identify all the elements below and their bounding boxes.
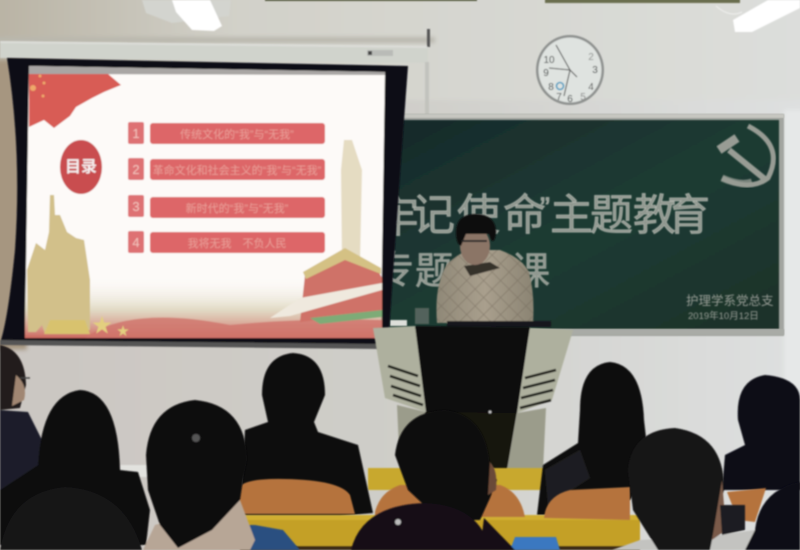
tiananmen and monument bbox=[270, 140, 382, 324]
chalk heading: 命 bbox=[503, 192, 546, 240]
wall clock: 6 bbox=[567, 94, 573, 105]
contents row 4: 我将无我 不负人民 bbox=[188, 236, 286, 250]
front row students bbox=[0, 345, 800, 550]
wall clock: 5 bbox=[580, 92, 586, 103]
wall clock: 3 bbox=[592, 65, 598, 76]
student: short hair centre bbox=[240, 353, 373, 516]
chalk heading: 主 bbox=[550, 192, 593, 240]
projector screen housing bbox=[0, 29, 430, 118]
contents row 1: 1 bbox=[132, 126, 140, 141]
contents row 2: 革命文化和社会主义的“我”与“无我” bbox=[153, 163, 322, 177]
back row students bbox=[240, 353, 800, 516]
student: front right ponytail bbox=[612, 428, 755, 550]
chalk heading: 牢 bbox=[376, 194, 419, 242]
student: centre head bbox=[395, 410, 497, 520]
contents row 4 bbox=[128, 231, 325, 253]
chalk signature bbox=[686, 293, 774, 322]
contents row 3: 新时代的“我”与“无我” bbox=[186, 201, 289, 215]
chalk signature: 护理学系党总支 bbox=[686, 293, 774, 308]
chalk heading: 教 bbox=[633, 192, 676, 240]
back desks bbox=[120, 465, 546, 490]
student: long hair left bbox=[0, 390, 150, 545]
contents row 1 bbox=[128, 122, 325, 144]
wall clock: 7 bbox=[556, 92, 562, 103]
wall clock: 8 bbox=[548, 82, 554, 93]
projector screen bbox=[0, 58, 408, 349]
projected slide bbox=[25, 66, 385, 338]
wall clock bbox=[536, 35, 604, 105]
stars bbox=[92, 315, 129, 338]
chalk sub heading bbox=[376, 250, 550, 293]
student: leather jacket right bbox=[537, 362, 648, 515]
wall clock: 9 bbox=[543, 68, 549, 79]
wall clock: 2 bbox=[588, 52, 594, 63]
lectern vents bbox=[388, 366, 556, 408]
contents row 3: 3 bbox=[132, 199, 140, 214]
chalkboard bbox=[376, 114, 784, 336]
chalk heading: 记 bbox=[412, 192, 455, 240]
contents row 2 bbox=[128, 158, 325, 180]
contents badge bbox=[60, 140, 102, 194]
front desk and chair backs bbox=[238, 479, 766, 550]
chalk signature: 2019年10月12日 bbox=[688, 310, 759, 322]
student: centre ponytail bbox=[143, 400, 300, 550]
bottom landscape bbox=[25, 275, 382, 338]
chalk sub heading: 课 bbox=[512, 251, 550, 293]
contents row 1: 传统文化的“我”与“无我” bbox=[180, 127, 294, 141]
chalk sub heading: 题 bbox=[415, 251, 453, 293]
lectern bbox=[373, 326, 573, 470]
student: bottom centre head bbox=[351, 503, 560, 550]
student: far right bbox=[722, 375, 800, 490]
chalk heading: ” bbox=[540, 192, 550, 225]
student: front right dark bbox=[745, 482, 800, 550]
chair backs bbox=[238, 479, 766, 522]
hammer and sickle bbox=[719, 126, 773, 185]
chalk heading bbox=[376, 192, 710, 242]
wall clock: 10 bbox=[543, 55, 555, 66]
student: far left bbox=[0, 345, 42, 490]
ceiling lights bbox=[142, 0, 800, 32]
monument statues bbox=[27, 195, 90, 334]
stars: ★ bbox=[92, 315, 112, 337]
chalk sub heading: 专 bbox=[376, 250, 414, 292]
chalk heading: 使 bbox=[457, 192, 500, 240]
contents badge: 目录 bbox=[65, 158, 97, 176]
chalk heading: 题 bbox=[590, 192, 633, 240]
contents row 4: 4 bbox=[132, 235, 140, 250]
contents row 2: 2 bbox=[132, 162, 140, 177]
flag graphic bbox=[29, 74, 121, 128]
stars: ★ bbox=[117, 324, 129, 338]
wall clock: 4 bbox=[588, 82, 594, 93]
student: bottom left bbox=[0, 487, 142, 550]
contents row 3 bbox=[128, 195, 325, 218]
speaker bbox=[390, 214, 551, 327]
chalk heading: 育 bbox=[667, 192, 710, 240]
